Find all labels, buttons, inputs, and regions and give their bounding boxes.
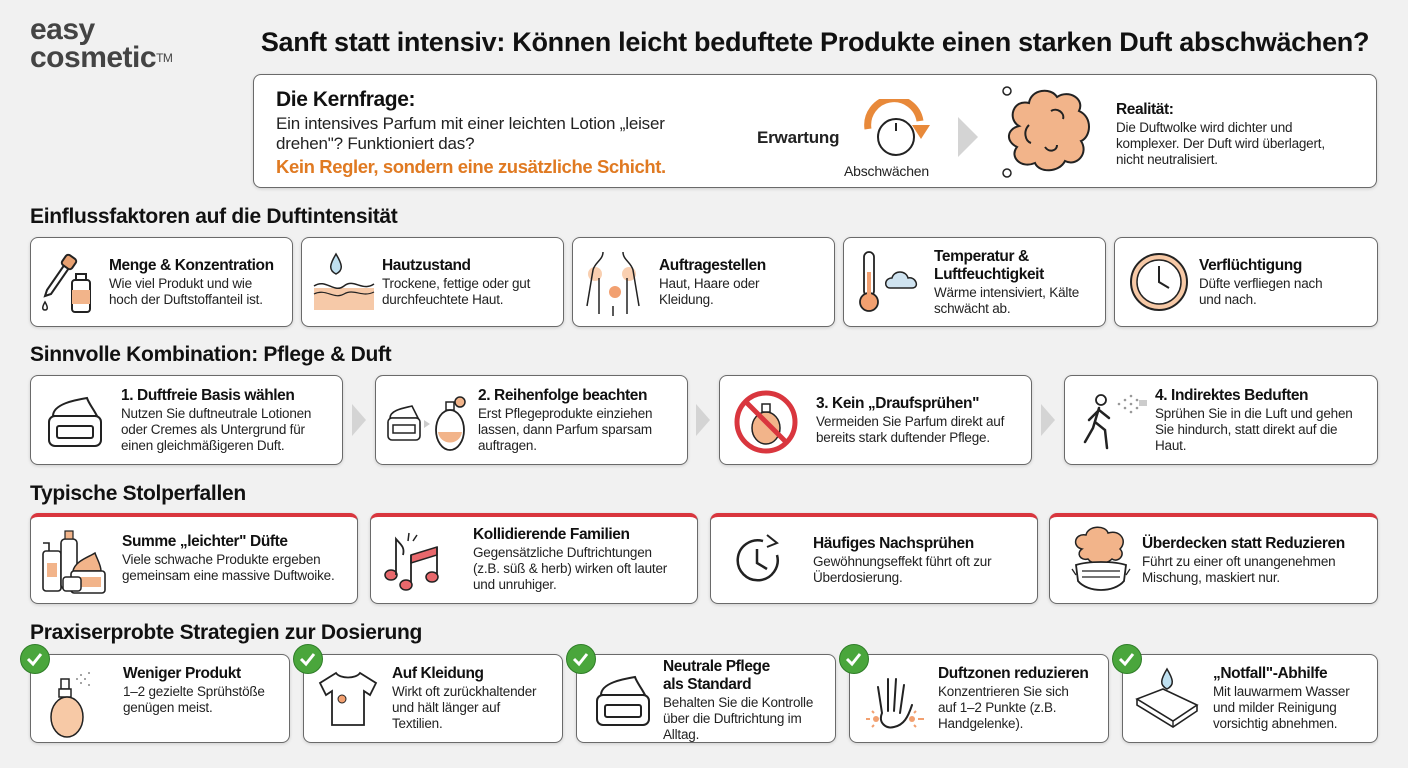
card: Summe: Viele schwache Produkte ergeben: [122, 552, 320, 567]
card: Menge: [30, 237, 293, 327]
card: Auftragestellen: Auftragestellen: [659, 257, 766, 274]
card: Überdecken: Führt zu einer oft unangenehmen: [1142, 554, 1335, 569]
card: Hautzustand: Hautzustand: [382, 257, 471, 274]
card: Auf Kleidung: und hält länger auf: [392, 700, 500, 715]
card: Auf Kleidung: Auf Kleidung: [392, 665, 484, 682]
card: Auf Kleidung: Textilien.: [392, 716, 443, 731]
card: step 1: einen gleichmäßigeren Duft.: [121, 438, 284, 453]
card: Auftragestellen: Haut, Haare oder: [659, 276, 759, 291]
card: Temperatur: [843, 237, 1106, 327]
card: Weniger Produkt: 1–2 gezielte Sprühstöße: [123, 684, 265, 699]
card: Duftzonen: Handgelenke).: [938, 716, 1023, 731]
card: Duftzonen: [849, 654, 1109, 743]
text: Kernfrage: drehen"? Funktioniert das?: [276, 134, 474, 153]
card: Temperatur: Luftfeuchtigkeit: [934, 266, 1044, 283]
card: Summe: gemeinsam eine massive Duftwoike.: [122, 568, 334, 583]
icon: cloud: [1002, 86, 1090, 178]
card: Temperatur: Temperatur &: [934, 248, 1029, 265]
card: Verflüchtigung: [1114, 237, 1378, 327]
card: Summe: Summe „leichter" Düfte: [122, 533, 288, 550]
card: step 2: 2. Reihenfolge beachten: [478, 387, 647, 404]
card: Hautzustand: durchfeuchtete Haut.: [382, 292, 503, 307]
text: Kernfrage: Ein intensives Parfum mit einer leichten Lotion „leiser: [276, 114, 665, 133]
icon: check: [566, 644, 596, 674]
card: step 1: oder Cremes als Untergrund für: [121, 422, 305, 437]
card: step 3: Vermeiden Sie Parfum direkt auf: [816, 414, 1004, 429]
card: Verflüchtigung: Düfte verfliegen nach: [1199, 276, 1322, 291]
card: Nachsprühen: Häufiges Nachsprühen: [813, 535, 974, 552]
icon: check: [293, 644, 323, 674]
text: Realität: komplexer. Der Duft wird überlagert,: [1116, 136, 1325, 151]
label: Erwartung: Erwartung: [757, 128, 839, 147]
text: Kernfrage: [276, 88, 666, 177]
card: Kollidierende: und unruhiger.: [473, 577, 557, 592]
card: Neutrale Pflege: Neutrale Pflege: [663, 658, 770, 675]
card: Kollidierende: [370, 513, 698, 604]
label: Abschwächen: Abschwächen: [844, 163, 929, 179]
card: Auf Kleidung: [303, 654, 563, 743]
arrow: [696, 404, 710, 436]
panel: Kombination row: [29, 375, 1379, 467]
card: step 4: [1064, 375, 1378, 465]
card: Weniger Produkt: Weniger Produkt: [123, 665, 241, 682]
card: step 2: lassen, dann Parfum sparsam: [478, 422, 652, 437]
card: Duftzonen: Konzentrieren Sie sich: [938, 684, 1069, 699]
card: Neutrale Pflege: Alltag.: [663, 727, 699, 742]
logo: cosmeticTM: [30, 41, 172, 74]
arrow: [958, 117, 978, 157]
card: step 4: Haut.: [1155, 438, 1186, 453]
card: Hautzustand: [301, 237, 564, 327]
card: Auftragestellen: [572, 237, 835, 327]
card: step 1: Nutzen Sie duftneutrale Lotionen: [121, 406, 311, 421]
card: Notfall: [1122, 654, 1378, 743]
card: step 4: Sprühen Sie in die Luft und gehen: [1155, 406, 1353, 421]
card: step 2: auftragen.: [478, 438, 537, 453]
card: Menge: Wie viel Produkt und wie: [109, 276, 252, 291]
card: Kollidierende: Gegensätzliche Duftrichtungen: [473, 545, 652, 560]
title: Sanft statt intensiv: Können leicht beduftete Produkte einen starken Duft abschwächen?: [261, 27, 1369, 57]
arrow: [1041, 404, 1055, 436]
text: Realität: Realität:: [1116, 101, 1174, 118]
card: step 2: Erst Pflegeprodukte einziehen: [478, 406, 652, 421]
panel: Stolperfallen row: [29, 513, 1379, 606]
card: step 3: [719, 375, 1032, 465]
heading: Sinnvolle Kombination: Sinnvolle Kombination: Pflege & Duft: [30, 343, 391, 366]
card: Überdecken: [1049, 513, 1378, 604]
logo: easy: [30, 13, 95, 46]
panel: Kernfrage: [253, 74, 1377, 188]
card: Notfall: vorsichtig abnehmen.: [1213, 716, 1337, 731]
card: Nachsprühen: [710, 513, 1038, 604]
card: Temperatur: Wärme intensiviert, Kälte: [934, 285, 1079, 300]
card: Weniger Produkt: genügen meist.: [123, 700, 213, 715]
panel: Strategien row: [20, 644, 1379, 745]
card: Duftzonen: auf 1–2 Punkte (z.B.: [938, 700, 1056, 715]
icon: check: [839, 644, 869, 674]
icon: dial: [864, 99, 930, 156]
card: Kollidierende: Kollidierende Familien: [473, 526, 630, 543]
text: Realität: nicht neutralisiert.: [1116, 152, 1218, 167]
panel: Einflussfaktoren row: [29, 237, 1379, 329]
card: step 1: [30, 375, 343, 465]
card: Notfall: und milder Reinigung: [1213, 700, 1337, 715]
card: step 1: 1. Duftfreie Basis wählen: [121, 387, 294, 404]
card: Notfall: „Notfall"-Abhilfe: [1213, 665, 1327, 682]
card: Neutrale Pflege: über die Duftrichtung im: [663, 711, 802, 726]
card: Überdecken: Mischung, maskiert nur.: [1142, 570, 1280, 585]
card: Auftragestellen: Kleidung.: [659, 292, 714, 307]
card: Auf Kleidung: Wirkt oft zurückhaltender: [392, 684, 536, 699]
card: step 4: 4. Indirektes Beduften: [1155, 387, 1308, 404]
card: Neutrale Pflege: als Standard: [663, 676, 751, 693]
heading: Einflussfaktoren: Einflussfaktoren auf die Duftintensität: [30, 205, 398, 228]
card: Temperatur: schwächt ab.: [934, 301, 1010, 316]
logo: [30, 13, 172, 74]
text: Kernfrage: Kein Regler, sondern eine zusätzliche Schicht.: [276, 156, 666, 177]
icon: check: [1112, 644, 1142, 674]
card: step 3: 3. Kein „Draufsprühen": [816, 395, 979, 412]
card: Neutrale Pflege: Behalten Sie die Kontrolle: [663, 695, 813, 710]
card: Notfall: Mit lauwarmem Wasser: [1213, 684, 1350, 699]
arrow: [352, 404, 366, 436]
card: Menge: Menge & Konzentration: [109, 257, 274, 274]
icon: check: [20, 644, 50, 674]
card: Kollidierende: (z.B. süß & herb) wirken oft lauter: [473, 561, 667, 576]
card: step 4: Sie hindurch, statt direkt auf die: [1155, 422, 1337, 437]
heading: Stolperfallen: Typische Stolperfallen: [30, 482, 246, 505]
card: Überdecken: Überdecken statt Reduzieren: [1142, 535, 1345, 552]
text: Realität: Die Duftwolke wird dichter und: [1116, 120, 1292, 135]
card: Summe: [30, 513, 358, 604]
card: Nachsprühen: Gewöhnungseffekt führt oft zur: [813, 554, 991, 569]
card: Menge: hoch der Duftstoffanteil ist.: [109, 292, 263, 307]
card: Verflüchtigung: Verflüchtigung: [1199, 257, 1302, 274]
text: Kernfrage: Die Kernfrage:: [276, 88, 415, 111]
heading: Strategien: Praxiserprobte Strategien zur Dosierung: [30, 621, 422, 644]
card: step 3: bereits stark duftender Pflege.: [816, 430, 990, 445]
card: Hautzustand: Trockene, fettige oder gut: [382, 276, 530, 291]
card: Verflüchtigung: und nach.: [1199, 292, 1256, 307]
card: Nachsprühen: Überdosierung.: [813, 570, 903, 585]
card: Weniger Produkt: [30, 654, 290, 743]
text: Realität: [1116, 101, 1325, 167]
card: step 2: [375, 375, 688, 465]
card: Neutrale Pflege: [576, 654, 836, 743]
card: Duftzonen: Duftzonen reduzieren: [938, 665, 1088, 682]
